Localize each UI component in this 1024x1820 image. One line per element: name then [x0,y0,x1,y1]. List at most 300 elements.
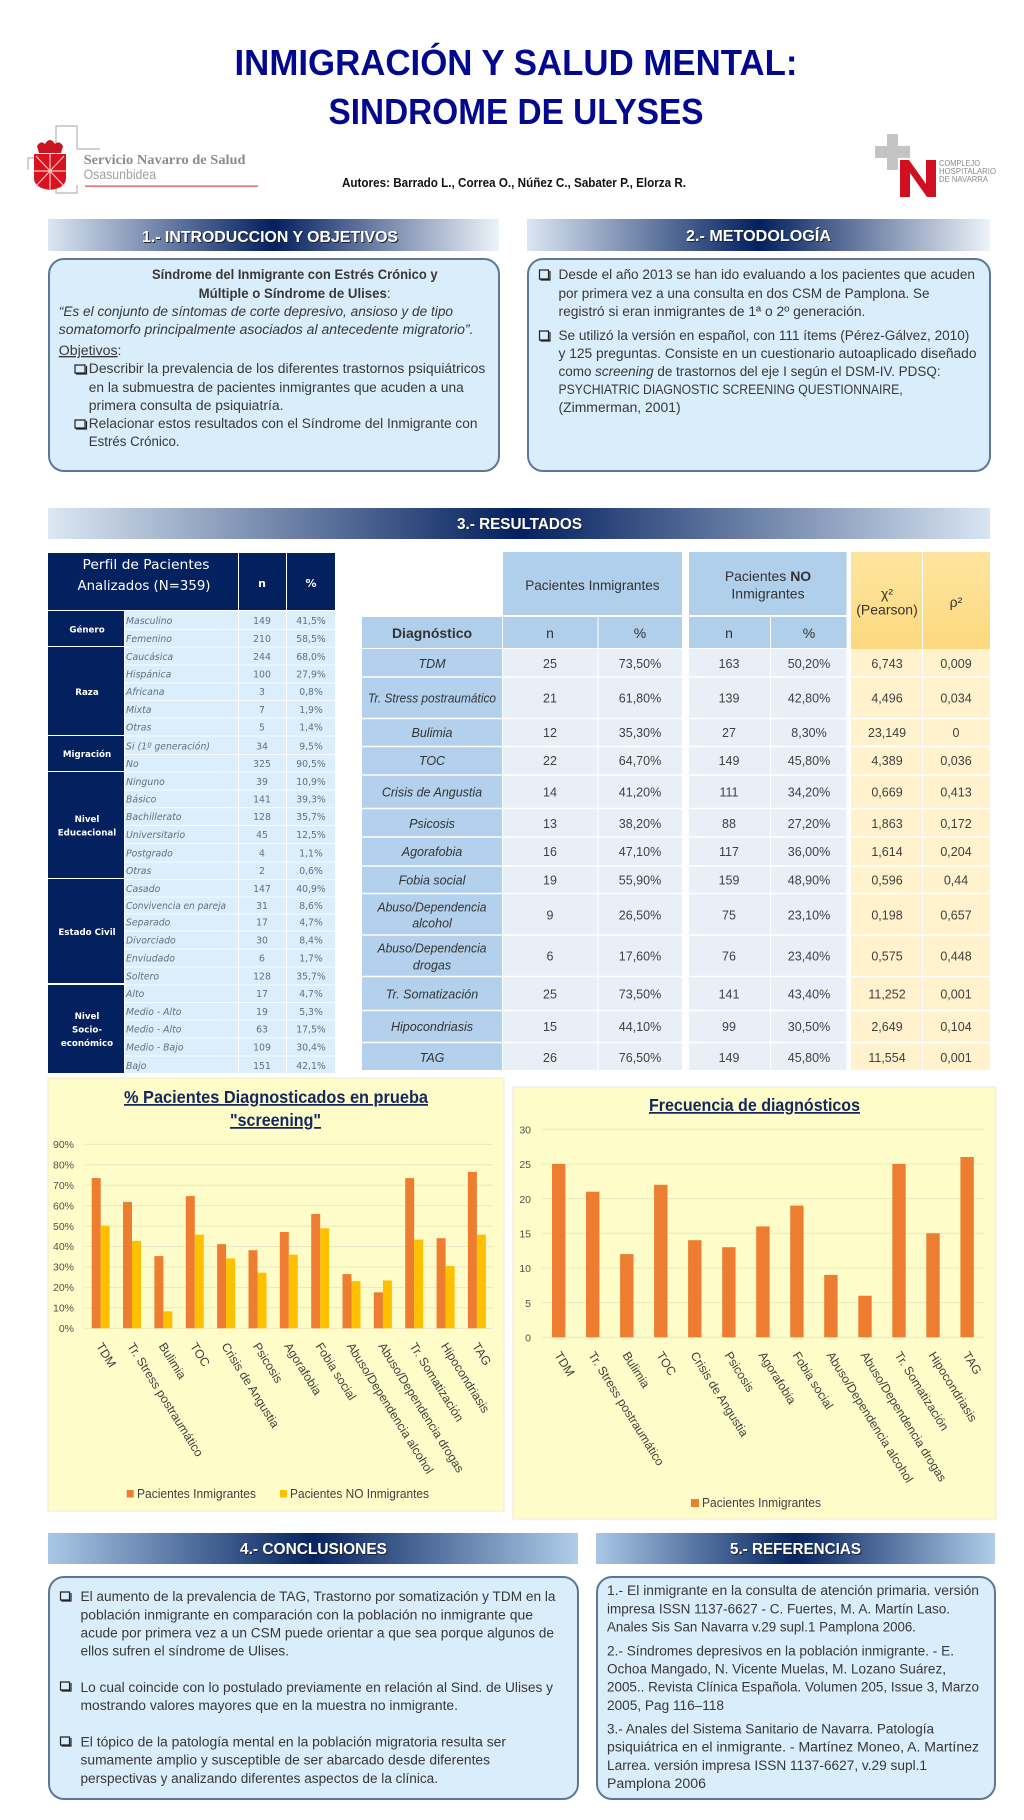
table: diagnosticos: 36,00% [788,845,830,859]
panel: metodologia: por primera vez a una consulta en dos CSM de Pamplona. Se [558,286,930,301]
table: perfil de pacientes: Bajo [126,1061,147,1072]
table: diagnosticos: Tr. Stress postraumático [368,692,496,706]
table: diagnosticos: 0,669 [871,786,903,800]
table: diagnosticos: Abuso/Dependencia [377,942,487,956]
table: diagnosticos: TAG [420,1051,445,1065]
panel: metodologia: Desde el año 2013 se han ido evaluando a los pacientes que acuden [558,267,975,282]
heading: referencias [596,1533,995,1564]
panel: referencias: 2005.. Revista Clínica Española. Volumen 205, Issue 3, Marzo [607,1680,979,1695]
table: perfil de pacientes: 34 [256,742,268,752]
table: diagnosticos: Agorafobia [401,845,462,859]
chart: frecuencia de diagnosticos: 10 [519,1263,531,1275]
table: perfil de pacientes: Medio - Bajo [126,1042,184,1054]
logo: Servicio Navarro de Salud [28,126,258,193]
table: perfil de pacientes: 4,7% [299,989,323,1000]
x axis labels: Abuso/Dependencia alcohol [824,1349,916,1485]
table: perfil de pacientes: Convivencia en pareja [126,901,226,912]
table: perfil de pacientes: 7 [259,705,265,716]
table: perfil de pacientes: n [258,577,266,590]
table: diagnosticos: 0,44 [944,874,968,888]
x axis labels: Hipocondriasis [438,1340,492,1415]
table: perfil de pacientes: 2 [259,866,265,877]
panel: introduccion y objetivos: Múltiple o Síndrome de Ulises: [199,286,391,301]
table: perfil de pacientes: Medio - Alto [126,1024,182,1036]
logo: Complejo Hospitalario de Navarra: DE NAVARRA [939,175,989,184]
table: perfil de pacientes: Socio- [72,1026,102,1036]
chart: % pacientes diagnosticados en prueba screening: 50% [53,1221,74,1233]
table: perfil de pacientes: Alto [125,989,145,1000]
table: diagnosticos: 0,009 [940,657,972,671]
heading: referencias: 5.- REFERENCIAS [730,1541,861,1558]
table: perfil de pacientes: 149 [253,616,271,627]
panel: conclusiones: ellos sufren el síndrome de Ulises. [80,1644,289,1659]
table: diagnosticos: Tr. Somatización [386,988,478,1002]
logo: Complejo Hospitalario de Navarra [875,134,996,197]
panel: conclusiones: población inmigrante en comparación con la población no inmigrante que [80,1607,533,1622]
table: perfil de pacientes: 8,6% [299,901,323,912]
table: diagnosticos: 50,20% [788,657,830,671]
table: perfil de pacientes: 17 [256,989,268,1000]
table: diagnosticos: 76 [722,950,736,964]
x axis labels [551,1349,985,1485]
table: diagnosticos: 88 [722,817,736,831]
table: perfil de pacientes: 1,4% [299,722,323,734]
chart: % pacientes diagnosticados en prueba screening: 80% [53,1160,74,1172]
panel: conclusiones: sumamente amplio y susceptible de ser abarcado desde diferentes [80,1753,490,1768]
table: diagnosticos: 47,10% [619,845,661,859]
table: perfil de pacientes: 12,5% [296,830,326,841]
table: perfil de pacientes: 17 [256,918,268,928]
table: perfil de pacientes: 39 [256,777,268,788]
table: perfil de pacientes: 63 [256,1024,268,1036]
logo: Servicio Navarro de Salud: Servicio Navarro de Salud [84,153,246,168]
table: diagnosticos: 0,001 [940,1051,972,1065]
table: diagnosticos: 75 [722,908,736,922]
table: perfil de pacientes: 30 [256,936,268,946]
table: diagnosticos: 159 [719,874,739,888]
table: perfil de pacientes: 8,4% [299,936,323,946]
table: diagnosticos: 0,657 [940,908,972,922]
table: diagnosticos: 45,80% [788,754,830,768]
panel: referencias: 2005, Pag 116–118 [607,1698,724,1713]
table: perfil de pacientes: 4,7% [299,918,323,928]
table: diagnosticos: 9 [547,908,554,922]
table: diagnosticos: n [725,625,733,641]
table: diagnosticos: 111 [719,786,739,800]
table: diagnosticos: Pacientes Inmigrantes [525,577,660,593]
table: perfil de pacientes: % [305,577,317,590]
table: perfil de pacientes: Ninguno [126,777,165,788]
chart: % pacientes diagnosticados en prueba screening: "screening" [230,1110,321,1130]
table: diagnosticos: 44,10% [619,1020,661,1034]
table: diagnosticos: 0,036 [940,754,972,768]
table: diagnosticos: 0,204 [940,845,972,859]
panel: metodologia [528,259,990,471]
panel: referencias: Larrea. versión impresa ISSN 1137-6627, v.29 supl.1 [607,1758,927,1773]
table: diagnosticos: 8,30% [791,726,827,740]
table: perfil de pacientes: 325 [253,759,271,770]
table: diagnosticos: TDM [418,657,446,671]
table: diagnosticos: 35,30% [619,726,661,740]
x axis labels: Crisis de Angustia [219,1340,282,1431]
table: perfil de pacientes: 39,3% [296,794,326,806]
table: diagnosticos: 23,149 [868,726,906,740]
table: diagnosticos: 27,20% [788,817,830,831]
table: perfil de pacientes: Analizados (N=359) [78,579,210,594]
table: perfil de pacientes: 109 [253,1042,271,1054]
table: perfil de pacientes: Otras [126,866,151,877]
table: perfil de pacientes: Género [69,624,105,636]
table: diagnosticos: alcohol [412,916,453,930]
table: diagnosticos: 1,614 [871,845,903,859]
table: perfil de pacientes: 128 [253,972,271,982]
table: diagnosticos: 0 [953,726,960,740]
table: diagnosticos: 0,198 [871,908,903,922]
table: perfil de pacientes: Otras [126,722,151,734]
panel: conclusiones: mostrando valores mayores que en la muestra no inmigrante. [80,1698,458,1713]
table: perfil de pacientes: 1,9% [299,705,323,716]
x axis labels: TOC [187,1340,213,1369]
table: perfil de pacientes: 100 [253,670,271,680]
chart: % pacientes diagnosticados en prueba screening: 40% [53,1241,74,1253]
table: diagnosticos: Abuso/Dependencia [377,900,487,914]
table: perfil de pacientes: Bachillerato [126,812,182,823]
table: diagnosticos: 163 [719,657,739,671]
title: INMIGRACIÓN Y SALUD MENTAL: [234,41,798,83]
table: diagnosticos: 14 [543,786,557,800]
table: diagnosticos: 25 [543,988,557,1002]
x axis labels: Fobia social [790,1349,836,1412]
table: diagnosticos: 38,20% [619,817,661,831]
table: perfil de pacientes: Separado [126,918,171,928]
heading: resultados: 3.- RESULTADOS [457,516,582,533]
table: perfil de pacientes: 147 [253,884,271,895]
panel: metodologia: PSYCHIATRIC DIAGNOSTIC SCREENING QUESTIONNAIRE, [558,382,903,397]
heading: introduccion y objetivos: 1.- INTRODUCCION Y OBJETIVOS [142,229,398,246]
x axis labels: Hipocondriasis [926,1349,980,1424]
panel: introduccion y objetivos: Objetivos: [59,343,122,358]
x axis labels: Tr. Stress postraumático [585,1349,667,1468]
table: perfil de pacientes: 151 [253,1061,271,1072]
table: perfil de pacientes: Estado Civil [58,928,116,938]
table: perfil de pacientes [48,553,335,1073]
table: diagnosticos: 0,575 [871,950,903,964]
table: perfil de pacientes: Básico [126,794,157,806]
table: perfil de pacientes: Educacional [58,828,116,838]
table: diagnosticos: 0,413 [940,786,972,800]
table: diagnosticos: 27 [722,726,736,740]
table: diagnosticos: 43,40% [788,988,830,1002]
heading: introduccion y objetivos [48,219,499,251]
x axis labels: Agorafobia [756,1349,799,1407]
table: diagnosticos: 0,001 [940,988,972,1002]
table: diagnosticos: 11,554 [868,1051,906,1065]
chart: % pacientes diagnosticados en prueba screening: 20% [53,1282,74,1294]
chart: % pacientes diagnosticados en prueba screening: 0% [59,1323,74,1335]
x axis labels: TAG [960,1349,985,1377]
table: diagnosticos: Inmigrantes [731,586,805,602]
chart: frecuencia de diagnosticos: 5 [525,1298,531,1310]
table: diagnosticos: 17,60% [619,950,661,964]
table: perfil de pacientes: 35,7% [296,972,326,982]
table: diagnosticos: Bulimia [412,726,453,740]
table: diagnosticos: 42,80% [788,692,830,706]
table: diagnosticos: 55,90% [619,874,661,888]
table: diagnosticos: 61,80% [619,692,661,706]
table: perfil de pacientes: 31 [256,901,268,912]
table: diagnosticos: 21 [543,692,557,706]
legend [127,1487,429,1501]
panel: referencias: impresa ISSN 1137-6627 - C. Fuertes, M. A. Martín Laso. [607,1601,950,1616]
x axis labels: Psicosis [250,1340,286,1386]
table: perfil de pacientes: Nivel [75,815,99,825]
table: diagnosticos: 19 [543,874,557,888]
table: perfil de pacientes: Casado [126,884,161,895]
panel: metodologia: Se utilizó la versión en español, con 111 ítems (Pérez-Gálvez, 2010) [558,328,969,343]
table: diagnosticos: drogas [413,958,451,972]
table: diagnosticos: 12 [543,726,557,740]
legend: Pacientes NO Inmigrantes [290,1487,429,1501]
panel: conclusiones: perspectivas y analizando diferentes aspectos de la clínica. [80,1771,438,1786]
table: perfil de pacientes: 1,1% [299,848,323,860]
title: SINDROME DE ULYSES [328,91,704,132]
table: perfil de pacientes: 17,5% [296,1024,326,1036]
panel: conclusiones: El tópico de la patología mental en la población migratoria resulta ser [80,1735,507,1750]
table: perfil de pacientes: 1,7% [299,954,323,964]
panel: metodologia: y 125 preguntas. Consiste en un cuestionario autoaplicado diseñado [558,346,976,361]
table: perfil de pacientes: Medio - Alto [126,1007,182,1018]
title [234,41,798,132]
table: diagnosticos: 23,40% [788,950,830,964]
table: perfil de pacientes: Postgrado [126,848,173,860]
x axis labels: Bulimia [156,1340,189,1382]
table: perfil de pacientes: 41,5% [296,616,326,627]
panel: referencias: Ochoa Mangado, N. Vicente Muelas, M. Lozano Suárez, [607,1661,946,1676]
chart: % pacientes diagnosticados en prueba screening: 90% [53,1139,74,1151]
table: perfil de pacientes: 0,8% [299,687,323,698]
table: diagnosticos: 11,252 [868,988,906,1002]
heading: metodologia: 2.- METODOLOGÍA [686,226,831,245]
table: diagnosticos: 139 [719,692,739,706]
authors: Autores: Barrado L., Correa O., Núñez C., Sabater P., Elorza R. [342,176,686,190]
table: perfil de pacientes: Universitario [126,830,185,841]
heading: conclusiones: 4.- CONCLUSIONES [240,1541,387,1558]
table: diagnosticos: 22 [543,754,557,768]
panel: metodologia: como screening de trastornos del eje I según el DSM-IV. PDSQ: [558,364,941,379]
table: diagnosticos: 149 [719,754,739,768]
x axis labels: Tr. Stress postraumático [124,1340,206,1459]
table: perfil de pacientes: 9,5% [299,742,323,752]
table: perfil de pacientes: 4 [259,848,265,860]
bars: pacientes no inmigrantes [101,1226,486,1328]
panel: introduccion y objetivos: primera consulta de psiquiatría. [89,398,284,413]
panel: conclusiones: acude por primera vez a un CSM puede orientar a que sea porque algunos de [80,1625,554,1640]
logo: Servicio Navarro de Salud: Osasunbidea [84,166,156,182]
bars: pacientes inmigrantes [92,1172,477,1328]
table: perfil de pacientes: Raza [75,688,99,698]
x axis labels: TDM [93,1340,119,1370]
table: diagnosticos: Pacientes NO [725,568,811,584]
table: diagnosticos: χ² [881,586,893,602]
table: diagnosticos: 23,10% [788,908,830,922]
chart: % pacientes diagnosticados en prueba screening: 60% [53,1200,74,1212]
panel: introduccion y objetivos: Relacionar estos resultados con el Síndrome del Inmigrante con [89,416,478,431]
table: diagnosticos: 117 [719,845,739,859]
heading: resultados [48,508,990,539]
panel: introduccion y objetivos: Describir la prevalencia de los diferentes trastornos psiquiátricos [89,361,486,376]
panel: introduccion y objetivos: somatomorfo principalmente asociados al antecedente migratorio”. [59,322,474,337]
panel: referencias: Anales Sis San Navarra v.29 supl.1 Pamplona 2006. [607,1619,916,1634]
table: diagnosticos: 76,50% [619,1051,661,1065]
table: perfil de pacientes: 19 [256,1007,268,1018]
chart: % pacientes diagnosticados en prueba screening: 30% [53,1262,74,1274]
x axis labels: TDM [551,1349,577,1379]
x axis labels: Crisis de Angustia [688,1349,751,1440]
table: perfil de pacientes: 40,9% [296,884,326,895]
panel: introduccion y objetivos: Síndrome del Inmigrante con Estrés Crónico y [152,267,438,282]
table: diagnosticos: 30,50% [788,1020,830,1034]
table: perfil de pacientes: Masculino [126,616,173,627]
table: perfil de pacientes: Caucásica [126,652,173,663]
table: diagnosticos: 1,863 [871,817,903,831]
table: diagnosticos: 99 [722,1020,736,1034]
table: diagnosticos: (Pearson) [856,602,918,618]
panel: referencias: Pamplona 2006 [607,1776,706,1791]
table: diagnosticos: Fobia social [399,874,467,888]
table: perfil de pacientes: 128 [253,812,271,823]
x axis labels: Abuso/Dependencia drogas [858,1349,949,1484]
table: diagnosticos: TOC [419,754,446,768]
table: perfil de pacientes: 30,4% [296,1042,326,1054]
panel: introduccion y objetivos: en la submuestra de pacientes inmigrantes que acuden a una [89,380,464,395]
x axis labels: Abuso/Dependencia drogas [375,1340,467,1475]
table: diagnosticos: 13 [543,817,557,831]
table: diagnosticos: 141 [719,988,739,1002]
panel: referencias [597,1577,995,1799]
chart: frecuencia de diagnosticos: Frecuencia de diagnósticos [649,1095,860,1115]
table: diagnosticos: 4,389 [871,754,903,768]
table: diagnosticos: 64,70% [619,754,661,768]
table: diagnosticos: 26,50% [619,908,661,922]
chart: % pacientes diagnosticados en prueba screening: 70% [53,1180,74,1192]
table: diagnosticos: Diagnóstico [392,625,472,641]
table: perfil de pacientes: 210 [253,634,271,645]
table: perfil de pacientes: 42,1% [296,1061,326,1072]
table: perfil de pacientes: Femenino [126,634,172,645]
chart: frecuencia de diagnosticos: 30 [519,1124,531,1136]
panel: referencias: 1.- El inmigrante en la consulta de atención primaria. versión [607,1583,979,1598]
table: perfil de pacientes: 244 [253,652,271,663]
x axis labels: Bulimia [620,1349,653,1391]
table: perfil de pacientes: 58,5% [296,634,326,645]
table: diagnosticos: 34,20% [788,786,830,800]
table: perfil de pacientes: Migración [63,749,111,760]
bars: pacientes inmigrantes [552,1157,974,1337]
heading: metodologia [527,219,990,251]
panel: conclusiones: El aumento de la prevalencia de TAG, Trastorno por somatización y TDM en la [80,1589,556,1604]
table: perfil de pacientes: económico [61,1038,113,1049]
panel: conclusiones [49,1577,578,1799]
table: diagnosticos: Hipocondriasis [391,1020,473,1034]
table: perfil de pacientes: Hispánica [126,670,172,680]
table: diagnosticos: n [546,625,554,641]
table: perfil de pacientes: 141 [253,794,271,806]
table: diagnosticos: Psicosis [409,817,455,831]
table: diagnosticos: ρ² [950,594,963,610]
chart: % pacientes diagnosticados en prueba screening [48,1078,504,1511]
table: perfil de pacientes: 3 [259,687,265,698]
chart: % pacientes diagnosticados en prueba screening: % Pacientes Diagnosticados en prueba [124,1087,428,1107]
panel: introduccion y objetivos [49,259,499,471]
panel: referencias: psiquiátrica en el inmigrante. - Martínez Moneo, A. Martínez [607,1740,979,1755]
table: perfil de pacientes: 45 [256,830,268,841]
panel: metodologia: (Zimmerman, 2001) [558,400,681,415]
heading: conclusiones [48,1533,578,1564]
chart: frecuencia de diagnosticos: 0 [525,1332,531,1344]
table: diagnosticos: 16 [543,845,557,859]
x axis labels: Psicosis [722,1349,757,1395]
table: diagnosticos: 45,80% [788,1051,830,1065]
table: perfil de pacientes: Perfil de Pacientes [82,558,210,573]
panel: introduccion y objetivos: Estrés Crónico. [89,434,180,449]
x axis labels: Abuso/Dependencia alcohol [344,1340,436,1476]
x axis labels: Agorafobia [281,1340,324,1398]
table: diagnosticos: 26 [543,1051,557,1065]
table: diagnosticos: 0,448 [940,950,972,964]
x axis labels: TOC [654,1349,679,1378]
x axis labels: Fobia social [313,1340,359,1403]
table: diagnosticos: 25 [543,657,557,671]
logo: Complejo Hospitalario de Navarra: HOSPITALARIO [939,167,996,176]
x axis labels [93,1340,494,1476]
table: perfil de pacientes: 5,3% [299,1007,323,1018]
chart: % pacientes diagnosticados en prueba screening: 10% [53,1302,74,1314]
table: perfil de pacientes: Nivel [75,1012,99,1022]
table: diagnosticos: 73,50% [619,657,661,671]
table: diagnosticos: 73,50% [619,988,661,1002]
panel: introduccion y objetivos: “Es el conjunto de síntomas de corte depresivo, ansioso y de tipo [59,304,453,319]
table: diagnosticos: 48,90% [788,874,830,888]
x axis labels: Tr. Somatización [892,1349,951,1433]
table: diagnosticos: 0,172 [940,817,972,831]
table: perfil de pacientes: Soltero [126,972,159,982]
table: perfil de pacientes: Divorciado [126,936,176,946]
table: diagnosticos: 4,496 [871,692,903,706]
table: diagnosticos: 149 [719,1051,739,1065]
table: diagnosticos: Crisis de Angustia [382,786,482,800]
chart: frecuencia de diagnosticos: 25 [519,1159,531,1171]
legend: Pacientes Inmigrantes [137,1487,256,1501]
table: perfil de pacientes: Mixta [126,705,152,716]
table: diagnosticos [362,552,990,1070]
chart: frecuencia de diagnosticos: 15 [519,1228,531,1240]
table: perfil de pacientes: 68,0% [296,652,326,663]
table: perfil de pacientes: Africana [125,687,165,698]
table: diagnosticos: 0,596 [871,874,903,888]
table: diagnosticos: 6 [547,950,554,964]
table: perfil de pacientes: 5 [259,722,265,734]
table: diagnosticos: % [803,625,815,641]
x axis labels: Tr. Somatización [407,1340,466,1424]
table: diagnosticos: 6,743 [871,657,903,671]
table: diagnosticos: % [634,625,646,641]
table: diagnosticos: 41,20% [619,786,661,800]
table: perfil de pacientes: 27,9% [296,670,326,680]
table: perfil de pacientes: 35,7% [296,812,326,823]
panel: referencias: 2.- Síndromes depresivos en la población inmigrante. - E. [607,1644,954,1659]
table: perfil de pacientes: 0,6% [299,866,323,877]
table: diagnosticos: 0,034 [940,692,972,706]
